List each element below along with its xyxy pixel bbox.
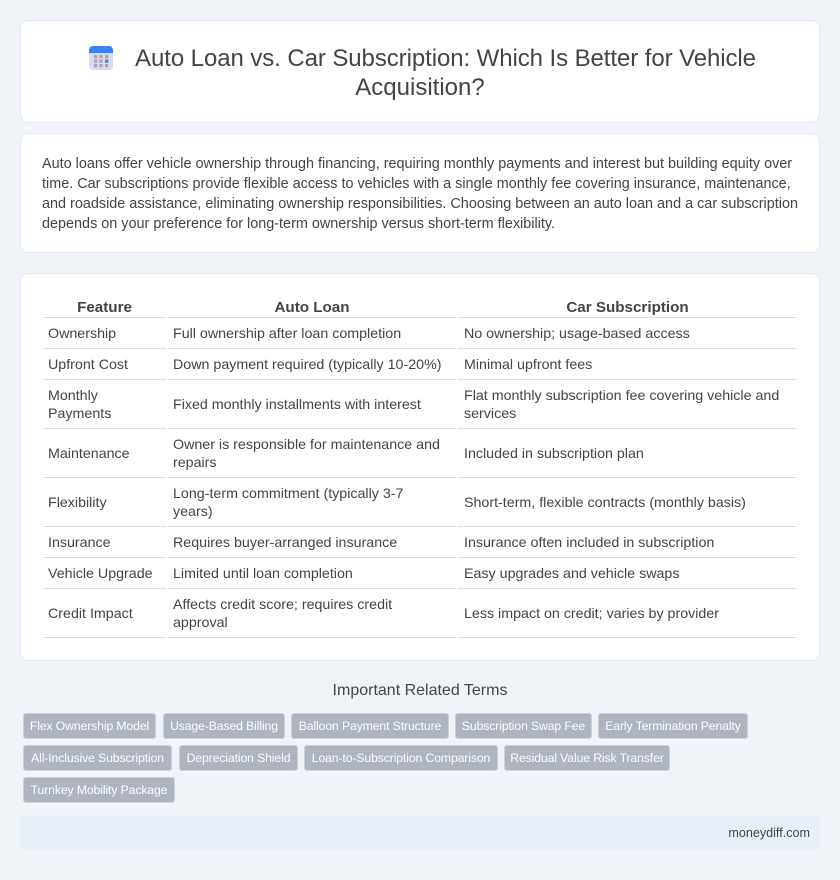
comparison table: Ownership <box>48 326 116 342</box>
header card <box>20 20 820 123</box>
tag: Turnkey Mobility Package <box>31 783 167 797</box>
comparison table: Fixed monthly installments with interest <box>173 396 421 412</box>
tag <box>23 713 156 739</box>
comparison table: Full ownership after loan completion <box>173 326 401 342</box>
comparison table <box>43 299 797 638</box>
comparison table: repairs <box>173 454 217 470</box>
tag: Early Termination Penalty <box>605 719 741 733</box>
comparison table: Included in subscription plan <box>464 446 644 462</box>
title: Auto Loan vs. Car Subscription: Which Is Better for Vehicle <box>135 45 756 72</box>
intro card <box>20 133 820 253</box>
intro text: depends on your preference for long-term ownership versus short-term flexibility. <box>42 216 555 232</box>
comparison table: years) <box>173 504 213 520</box>
tag: Subscription Swap Fee <box>462 719 585 733</box>
comparison table: Easy upgrades and vehicle swaps <box>464 566 679 582</box>
title: Acquisition? <box>355 74 485 101</box>
intro text: time. Car subscriptions provide flexible access to vehicles with a single monthly fee covering insurance, maintenance, <box>42 176 791 192</box>
tag: Usage-Based Billing <box>170 719 278 733</box>
tag <box>163 713 285 739</box>
comparison table: Car Subscription <box>566 299 689 316</box>
comparison table: Credit Impact <box>48 606 133 622</box>
comparison table: Insurance often included in subscription <box>464 534 714 550</box>
comparison table: No ownership; usage-based access <box>464 326 690 342</box>
comparison table: approval <box>173 614 228 630</box>
comparison table: Feature <box>77 299 132 316</box>
comparison table: Payments <box>48 406 111 422</box>
comparison table: Owner is responsible for maintenance and <box>173 436 440 452</box>
tag <box>598 713 748 739</box>
comparison table: Affects credit score; requires credit <box>173 596 392 612</box>
tag <box>504 745 670 771</box>
comparison table: Vehicle Upgrade <box>48 566 153 582</box>
comparison table: Less impact on credit; varies by provider <box>464 606 719 622</box>
intro text: Auto loans offer vehicle ownership through financing, requiring monthly payments and interest but building equity over <box>42 156 792 172</box>
comparison table: Maintenance <box>48 446 130 462</box>
comparison table: Minimal upfront fees <box>464 356 592 372</box>
comparison table: Short-term, flexible contracts (monthly basis) <box>464 494 746 510</box>
comparison table: Flat monthly subscription fee covering vehicle and <box>464 388 779 404</box>
tag <box>23 777 175 803</box>
related terms heading: Important Related Terms <box>333 682 507 699</box>
icon: calendar <box>89 46 113 70</box>
comparison table: Limited until loan completion <box>173 566 353 582</box>
comparison table: Upfront Cost <box>48 356 128 372</box>
tag: Residual Value Risk Transfer <box>510 751 664 765</box>
comparison table: Auto Loan <box>274 299 350 316</box>
title <box>135 45 756 101</box>
tag <box>291 713 449 739</box>
intro text <box>42 156 798 232</box>
footer bar <box>20 816 820 850</box>
tag: All-Inclusive Subscription <box>31 751 164 765</box>
related term tags <box>23 713 748 803</box>
tag <box>23 745 172 771</box>
tag <box>304 745 498 771</box>
tag: Depreciation Shield <box>187 751 290 765</box>
comparison table: services <box>464 406 516 422</box>
tag <box>455 713 592 739</box>
comparison table: Requires buyer-arranged insurance <box>173 534 397 550</box>
comparison table card <box>20 273 820 661</box>
comparison table: Monthly <box>48 388 98 404</box>
intro text: and roadside assistance, eliminating ownership responsibilities. Choosing between an auto loan and a car subscription <box>42 196 798 212</box>
tag: Balloon Payment Structure <box>299 719 441 733</box>
comparison table: Long-term commitment (typically 3-7 <box>173 486 403 502</box>
comparison table: Insurance <box>48 534 111 550</box>
tag <box>179 745 298 771</box>
footer source: moneydiff.com <box>728 826 810 840</box>
tag: Loan-to-Subscription Comparison <box>312 751 490 765</box>
tag: Flex Ownership Model <box>30 719 149 733</box>
comparison table: Flexibility <box>48 494 107 510</box>
comparison table: Down payment required (typically 10-20%) <box>173 356 442 372</box>
